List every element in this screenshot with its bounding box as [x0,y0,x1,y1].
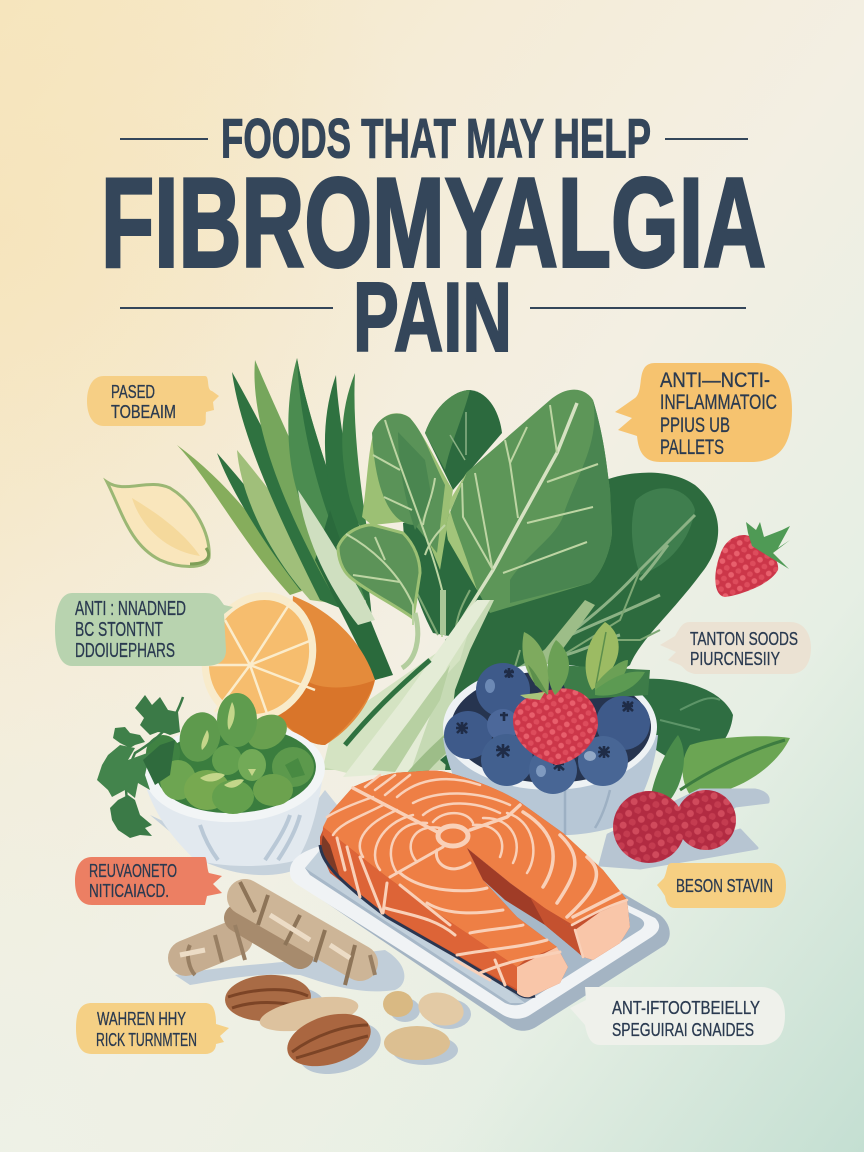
illustration: chard stems [323,600,595,777]
bowl rim [443,664,657,790]
callout: ant-iftootbeielly [570,987,785,1045]
callout: wahren hhy [76,1003,229,1054]
illustration: raspberries pair [613,790,736,863]
callout: anti-inflammatoic: ANTI—NCTI- [660,369,770,392]
illustration: lone raspberry [715,522,790,597]
callout: ant-iftootbeielly: SPEGUIRAI GNAIDES [612,1020,754,1040]
salmon top face [323,771,627,967]
callout: reuvaoneto [75,857,222,905]
leaves [520,622,645,700]
callout: tanton soods: TANTON SOODS [690,629,798,649]
illustration: green bowl [143,693,345,875]
illustration: spinach leaves [338,390,718,770]
green olives [146,693,314,814]
nut shadows [241,985,471,1083]
illustration: ginger root [175,882,404,991]
leaf: front large [446,390,612,613]
bowl rim [143,717,327,827]
leaf: back top [425,390,502,490]
callout: anti-inflammatoic: PPIUS UB [660,414,730,437]
heading: foods that may help: FOODS THAT MAY HELP [221,106,651,170]
orange body [268,596,375,745]
almond lower [281,1004,377,1076]
root shadow [175,950,404,991]
illustration: garlic clove [107,482,209,566]
callout: beson stavin [657,863,786,908]
illustration: berry shadows [600,790,768,868]
pale ends [575,900,630,960]
blueberries [444,663,650,794]
illustration: dark side leaf and basil [630,679,790,800]
illustration: parsley [97,695,183,838]
fat lines [327,775,627,985]
callout: anti nnadned [55,593,233,666]
callout: wahren hhy: RICK TURNMTEN [96,1030,197,1050]
pale nut [257,991,361,1037]
leaf: small lower left [338,525,420,618]
illustration: green blades [177,358,393,680]
callout: pased tobeaim: PASED [111,382,155,402]
callout: anti nnadned: BC STONTNT [75,619,163,641]
salmon notch wall [467,848,583,957]
heading: pain: PAIN [353,262,512,372]
callout: ant-iftootbeielly: ANT-IFTOOTBEIELLY [612,998,760,1018]
orange cut face [184,576,334,738]
callout: anti-inflammatoic: INFLAMMATOIC [660,391,777,414]
title [101,106,766,372]
tray [290,846,659,1019]
tray shadow [300,880,670,1031]
leaves behind berries [555,665,650,700]
illustration: berry bowl [443,622,658,835]
bowl body [443,735,658,835]
callout: wahren hhy: WAHREN HHY [97,1009,186,1029]
salmon side band [322,827,520,991]
dark leaf mass [403,510,490,640]
callout: beson stavin: BESON STAVIN [676,876,773,896]
callout: reuvaoneto: NITICAIACD. [89,881,169,901]
illustration: salmon on tray [290,771,670,1031]
bowl shadow [205,790,345,875]
callout: anti nnadned: DDOIUEPHARS [75,640,175,662]
leaf: left [362,413,453,570]
bowl body [147,775,323,866]
callout: anti nnadned: ANTI : NNADNED [75,598,186,620]
small nuts [383,991,413,1017]
callout: tanton soods: PIURCNESIIY [690,649,780,669]
callout: anti-inflammatoic [615,363,792,462]
salmon base [320,771,630,997]
callout: reuvaoneto: REUVAONETO [89,861,177,881]
callout: pased tobeaim: TOBEAIM [111,402,176,422]
illustration: halved orange [184,576,375,745]
raspberry [513,688,598,765]
leaf stem veins lower [490,570,660,700]
salmon skin edge [320,845,535,997]
illustration: almonds and nuts [224,973,471,1083]
callout: anti-inflammatoic: PALLETS [660,436,724,459]
callout: pased tobeaim [87,376,219,426]
almond upper [224,973,312,1023]
callout: tanton soods [660,622,811,674]
leaf: back right [445,473,718,770]
salmon centre [438,826,468,846]
